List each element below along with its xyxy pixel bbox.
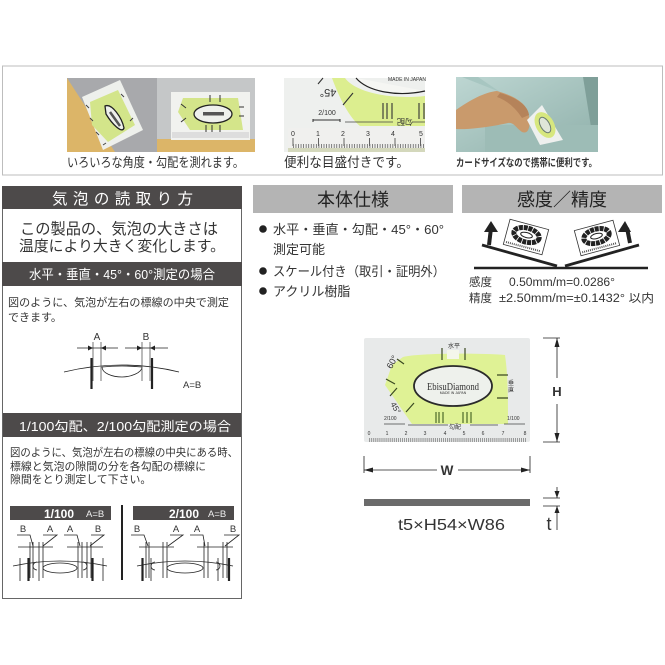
illustration: card level: 7 <box>502 431 505 437</box>
illustration: card level: 2/100 <box>384 416 397 422</box>
text block: temperature note: この製品の、気泡の大きさは <box>20 221 218 238</box>
panel: feature photos <box>2 66 662 175</box>
diagram: 2/100 <box>131 506 239 581</box>
text block: gradient instructions <box>10 445 238 486</box>
heading: sensitivity and accuracy: 感度／精度 <box>517 190 607 210</box>
heading: body specification: 本体仕様 <box>317 190 389 210</box>
illustration: card level: 6 <box>482 431 485 437</box>
photo: scale close-up: 1 <box>316 131 320 138</box>
heading: gradient measuring: 1/100勾配、2/100勾配測定の場合 <box>19 419 231 434</box>
photo: scale close-up: 2 <box>341 131 345 138</box>
photo: scale close-up: 45° <box>320 86 336 98</box>
photo: scale close-up: 0 <box>291 131 295 138</box>
heading: level, plumb, 45, 60 <box>2 262 242 286</box>
illustration: card level: 2 <box>405 431 408 437</box>
illustration: card level: EbisuDiamond <box>427 382 479 393</box>
list: specifications: 測定可能 <box>273 242 325 257</box>
illustration: card level: 3 <box>424 431 427 437</box>
heading: gradient measuring <box>3 413 241 437</box>
diagram: 1/100: 1/100 <box>44 507 74 521</box>
heading: body specification <box>253 185 453 213</box>
side view bar <box>364 499 530 506</box>
photo: scale close-up: 3 <box>366 131 370 138</box>
text block: gradient instructions: 図のように、気泡が左右の標線の中央にある時、 <box>10 445 238 459</box>
list: specifications: アクリル樹脂 <box>273 284 350 299</box>
caption: card size: カードサイズなので携帯に便利です。 <box>456 156 597 169</box>
diagram: 1/100: A <box>47 524 54 535</box>
heading: sensitivity and accuracy <box>462 185 662 213</box>
heading: how to read <box>2 186 242 209</box>
text block: temperature note: 温度により大きく変化します。 <box>19 238 225 255</box>
text block: level measuring instructions: できます。 <box>8 311 62 324</box>
photo: level at various angles <box>67 78 255 152</box>
photo: scale close-up: 2/100 <box>318 110 336 117</box>
illustration: card level: 直 <box>508 386 514 394</box>
illustration: card level: 垂 <box>508 380 514 387</box>
text block: sensitivity values <box>469 275 654 305</box>
diagram: 2/100: A <box>194 524 201 535</box>
heading: how to read: 気泡の読取り方 <box>52 190 193 208</box>
photo: scale close-up: 5 <box>419 131 423 138</box>
text block: sensitivity values: ±2.50mm/m=±0.1432° 以内 <box>499 291 654 305</box>
photo: scale close-up: MADE IN JAPAN <box>388 77 426 83</box>
diagram: A=B bubble position: A <box>94 332 101 343</box>
dimension: t <box>543 487 560 534</box>
panel: how to read the bubble <box>2 186 242 598</box>
diagram: tilted levels on incline <box>474 219 648 268</box>
illustration: card level: 8 <box>524 431 527 437</box>
diagram: 2/100: 2/100 <box>169 507 199 521</box>
dimension: W: W <box>441 463 454 478</box>
diagram: 1/100 <box>10 506 111 581</box>
text block: level measuring instructions: 図のように、気泡が左右の標線の中央で測定 <box>8 295 229 309</box>
illustration: card level: 水平 <box>448 342 460 350</box>
text block: gradient instructions: 隙間をとり測定して下さい。 <box>10 472 151 486</box>
illustration: card level: 4 <box>444 431 447 437</box>
diagram: 2/100: B <box>134 524 140 535</box>
diagram: A=B bubble position: A=B <box>183 380 201 391</box>
text block: sensitivity values: 0.50mm/m=0.0286° <box>509 277 615 289</box>
illustration: card level: 1 <box>386 431 389 437</box>
text block: sensitivity values: 感度 <box>469 275 492 289</box>
text block: level measuring instructions <box>8 295 229 324</box>
dimension: H <box>543 338 562 442</box>
caption: angles: いろいろな角度・勾配を測れます。 <box>67 155 244 170</box>
panel: body specification <box>253 185 453 299</box>
diagram: 2/100: A <box>173 524 180 535</box>
illustration: card level: MADE IN JAPAN <box>440 391 467 395</box>
text block: gradient instructions: 標線と気泡の隙間の分を各勾配の標線に <box>10 459 206 473</box>
diagram: A=B bubble position: B <box>143 332 150 343</box>
divider: between gradient diagrams <box>121 505 123 580</box>
illustration: card level: 勾配 <box>449 423 461 431</box>
caption: scale: 便利な目盛付きです。 <box>284 155 409 170</box>
heading: level, plumb, 45, 60: 水平・垂直・45°・60°測定の場合 <box>29 267 215 282</box>
illustration: card level: 1/100 <box>507 416 520 422</box>
text block: sensitivity values: 精度 <box>469 292 492 305</box>
dimension: W <box>364 456 530 478</box>
diagram: 2/100: A=B <box>208 509 226 520</box>
illustration: card level: 5 <box>463 431 466 437</box>
diagram: A=B bubble position <box>64 332 201 391</box>
illustration: card level: 60° <box>385 353 400 370</box>
dimension: H: H <box>552 384 562 399</box>
illustration: card level <box>364 338 530 442</box>
list: specifications: スケール付き（取引・証明外） <box>273 264 445 279</box>
illustration: card level: 45° <box>389 400 402 415</box>
text: dimensions: t5×H54×W86 <box>398 517 505 534</box>
diagram: 1/100: A=B <box>86 509 104 520</box>
diagram: 1/100: A <box>67 524 74 535</box>
panel: dimensions drawing <box>364 338 562 534</box>
photo: card in shirt pocket <box>456 77 598 152</box>
diagram: 2/100: B <box>230 524 236 535</box>
photo: scale close-up <box>284 77 426 152</box>
list: specifications <box>259 222 445 299</box>
diagram: 1/100: B <box>95 524 101 535</box>
text block: temperature note <box>19 221 225 255</box>
photo: scale close-up: 4 <box>391 131 395 138</box>
panel: sensitivity and accuracy <box>462 185 662 305</box>
photo: scale close-up: 勾配 <box>397 117 413 127</box>
illustration: card level: 0 <box>368 431 371 437</box>
dimension: t: t <box>546 514 552 534</box>
diagram: 1/100: B <box>20 524 26 535</box>
list: specifications: 水平・垂直・勾配・45°・60° <box>273 222 444 237</box>
